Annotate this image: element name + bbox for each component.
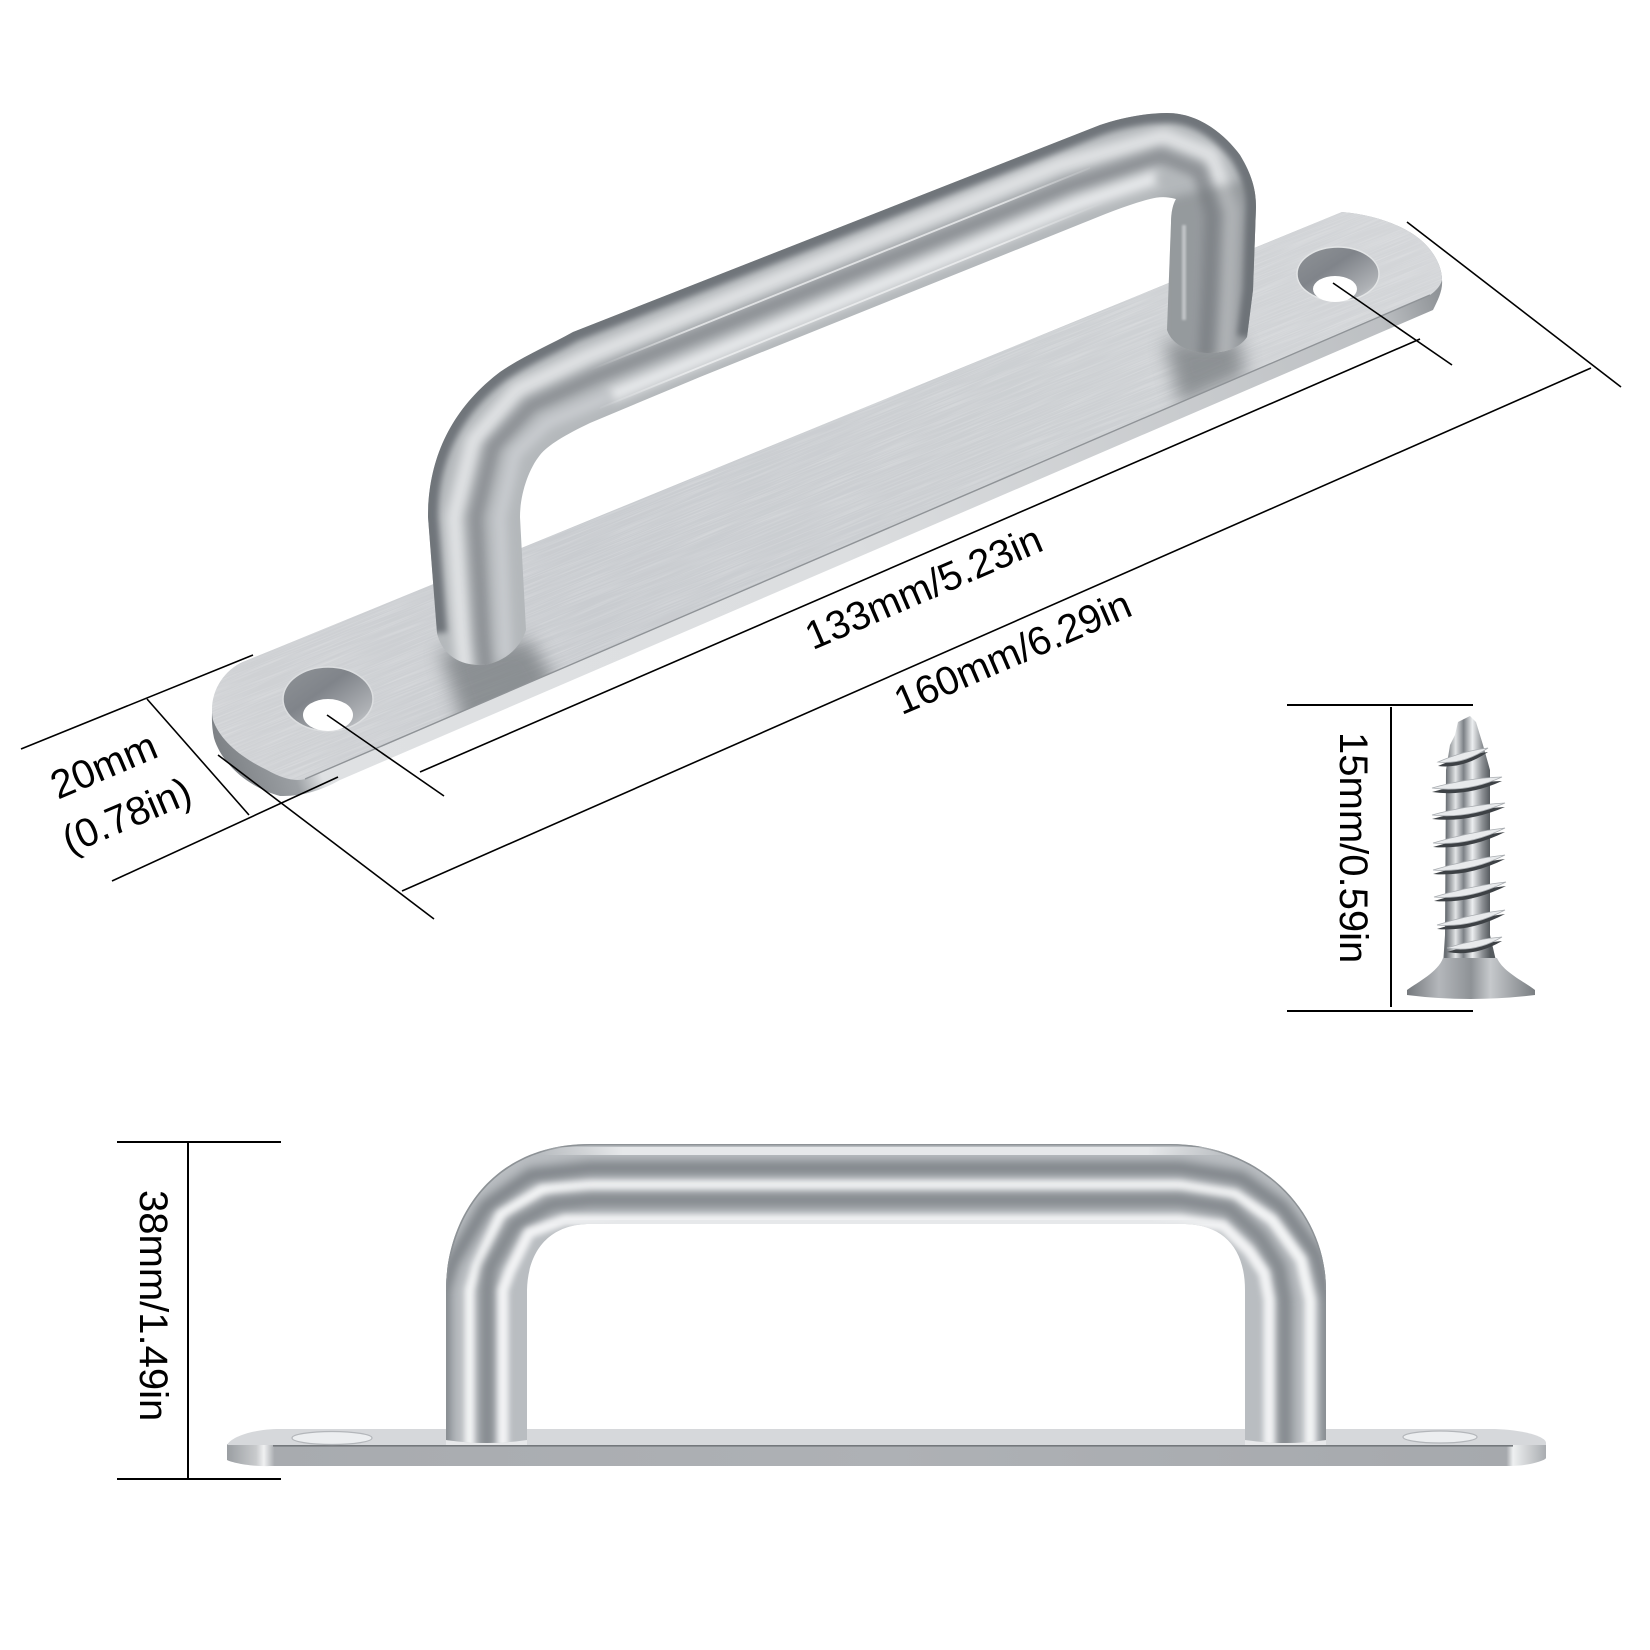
dimension: 160mm/6.29in: 160mm/6.29in — [888, 583, 1138, 724]
mounting plate side edge — [212, 212, 1442, 796]
left countersunk hole — [283, 667, 373, 731]
dimension: 160mm/6.29in — [218, 222, 1621, 919]
right countersunk hole — [1297, 247, 1379, 302]
front-view handle: plate and pull bar — [227, 1130, 1546, 1466]
front plate right hole — [1403, 1431, 1477, 1443]
pull bar — [428, 113, 1256, 665]
dimension: 20mm (0.78in) — [21, 655, 338, 881]
icon: screw — [1407, 716, 1535, 999]
angled handle: plate and pull bar — [212, 113, 1442, 796]
dimension: 133mm/5.23in — [327, 283, 1452, 796]
plate front edge line — [305, 295, 1430, 779]
front plate side edge — [227, 1443, 1546, 1466]
front plate left hole — [292, 1432, 372, 1444]
dimension: 15mm/0.59in: 15mm/0.59in — [1331, 732, 1375, 963]
dimension: 133mm/5.23in: 133mm/5.23in — [799, 518, 1049, 659]
dimension: 20mm (0.78in): 20mm — [44, 724, 164, 808]
dimension: 38mm/1.49in: 38mm/1.49in — [131, 1190, 175, 1421]
front plate top face — [227, 1429, 1546, 1445]
front pull bar — [446, 1144, 1326, 1443]
feet lips — [446, 1439, 527, 1445]
mounting plate top face — [212, 212, 1442, 780]
dimension: 20mm (0.78in): (0.78in) — [56, 769, 198, 863]
